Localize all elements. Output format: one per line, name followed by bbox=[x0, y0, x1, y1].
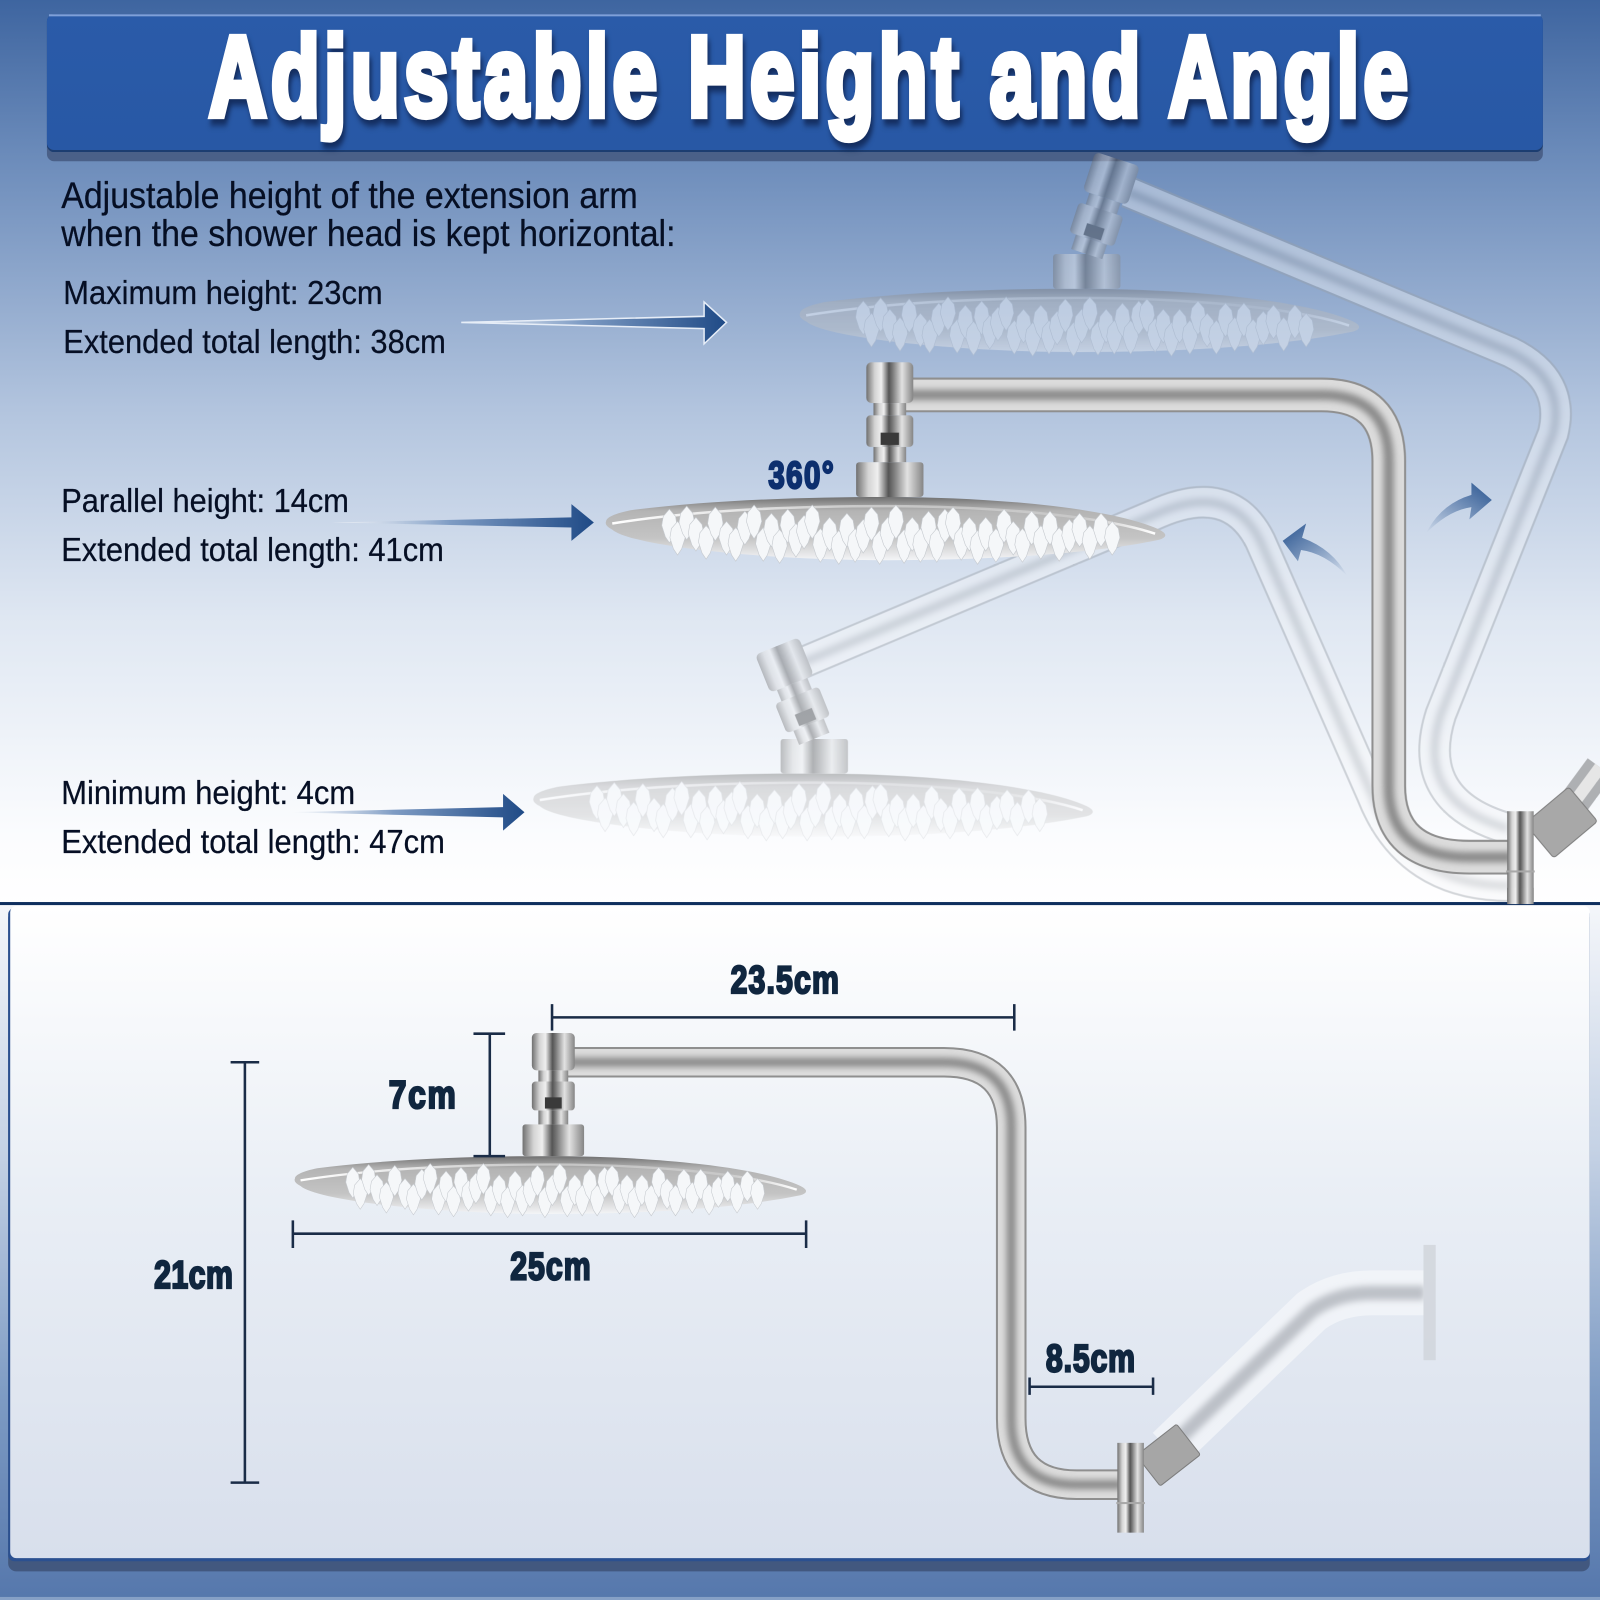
intro text block: Adjustable height of the extension arm bbox=[61, 175, 638, 216]
arrow: to parallel position bbox=[332, 504, 594, 541]
main shower head bbox=[606, 362, 1165, 564]
panel: dimensions bbox=[8, 906, 1590, 1571]
intro text block bbox=[60, 175, 676, 254]
dimension: 7cm bbox=[389, 1034, 505, 1156]
maximum height position: ghost shower arm bbox=[800, 152, 1556, 829]
dimension: 25cm: 25cm bbox=[510, 1246, 591, 1289]
dimensioned shower arm bbox=[295, 1033, 1436, 1533]
arrow: to minimum position bbox=[286, 794, 524, 831]
curved arrow: up-left bbox=[1283, 523, 1347, 576]
minimum height stats bbox=[61, 775, 445, 861]
dimension: 25cm bbox=[293, 1220, 806, 1289]
title: Adjustable Height and Angle bbox=[209, 13, 1408, 140]
dimension: 21cm bbox=[154, 1062, 259, 1483]
minimum height stats: Minimum height: 4cm bbox=[61, 775, 355, 812]
parallel height stats bbox=[61, 483, 444, 569]
wall connector bbox=[1506, 767, 1600, 901]
parallel position: main shower arm bbox=[606, 362, 1600, 901]
parallel height stats: Extended total length: 41cm bbox=[61, 532, 444, 569]
parallel height stats: Parallel height: 14cm bbox=[61, 483, 349, 520]
minimum height position: ghost shower arm bbox=[533, 502, 1510, 886]
dimension: 21cm: 21cm bbox=[154, 1254, 233, 1297]
bottom light strip bbox=[0, 1597, 1600, 1600]
360 degree label: 360° bbox=[768, 454, 834, 497]
lower background bbox=[0, 906, 1600, 1600]
intro text block: when the shower head is kept horizontal: bbox=[60, 213, 676, 254]
section divider line bbox=[0, 902, 1600, 905]
maximum height stats: Extended total length: 38cm bbox=[63, 324, 446, 361]
background gradient bbox=[0, 0, 1600, 908]
curved arrow: up-right bbox=[1427, 483, 1492, 533]
connector overlap across divider bbox=[1507, 888, 1534, 904]
arrow: to maximum position bbox=[461, 302, 727, 344]
dimension: 7cm: 7cm bbox=[389, 1073, 456, 1117]
dimension: 8.5cm: 8.5cm bbox=[1046, 1338, 1135, 1380]
dimension: 8.5cm bbox=[1030, 1338, 1153, 1395]
maximum height stats: Maximum height: 23cm bbox=[63, 275, 383, 312]
minimum height stats: Extended total length: 47cm bbox=[61, 824, 445, 861]
title banner bbox=[47, 13, 1543, 161]
maximum height stats bbox=[63, 275, 446, 361]
dimension: 23.5cm: 23.5cm bbox=[731, 959, 839, 1002]
wall arm, translucent bbox=[1168, 1245, 1436, 1449]
dimension: 23.5cm bbox=[552, 959, 1014, 1031]
